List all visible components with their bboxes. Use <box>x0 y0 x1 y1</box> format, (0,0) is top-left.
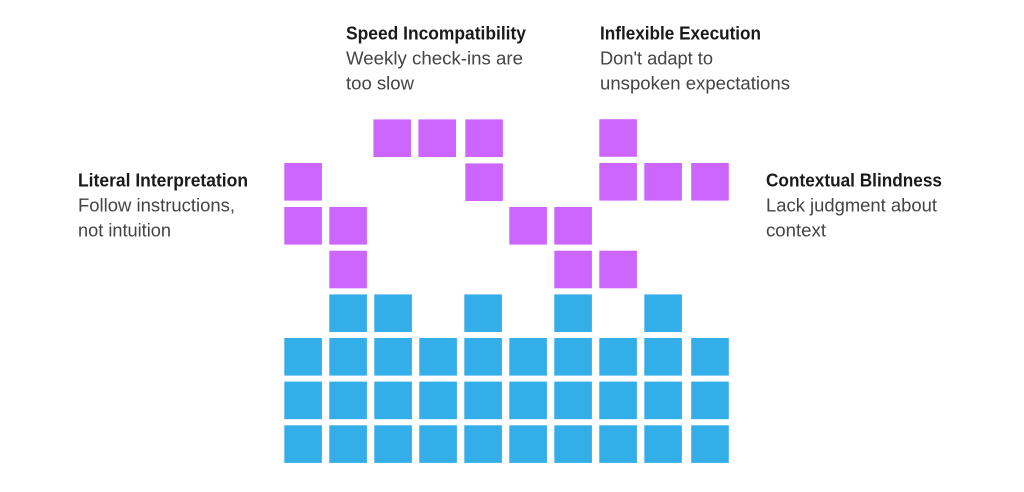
label: Speed Incompatibility <box>346 24 526 94</box>
label: Contextual Blindness <box>766 170 942 240</box>
label: Speed Incompatibility: Speed Incompatibility <box>346 24 526 44</box>
label: Contextual Blindness: Contextual Blindness <box>766 170 942 190</box>
label: Inflexible Execution <box>600 24 790 94</box>
label: Contextual Blindness: Lack judgment about <box>766 196 937 216</box>
label: Literal Interpretation: Follow instructions, <box>78 196 235 216</box>
label: Literal Interpretation: not intuition <box>78 220 171 240</box>
blue squares: foundation <box>284 294 729 463</box>
purple squares: gaps <box>284 119 729 288</box>
label: Literal Interpretation <box>78 170 248 240</box>
label: Contextual Blindness: context <box>766 220 826 240</box>
label: Speed Incompatibility: too slow <box>346 74 415 94</box>
label: Speed Incompatibility: Weekly check-ins are <box>346 48 523 68</box>
label: Inflexible Execution: Inflexible Execution <box>600 24 761 44</box>
label: Literal Interpretation: Literal Interpretation <box>78 170 248 190</box>
label: Inflexible Execution: Don't adapt to <box>600 48 713 68</box>
label: Inflexible Execution: unspoken expectations <box>600 74 790 94</box>
